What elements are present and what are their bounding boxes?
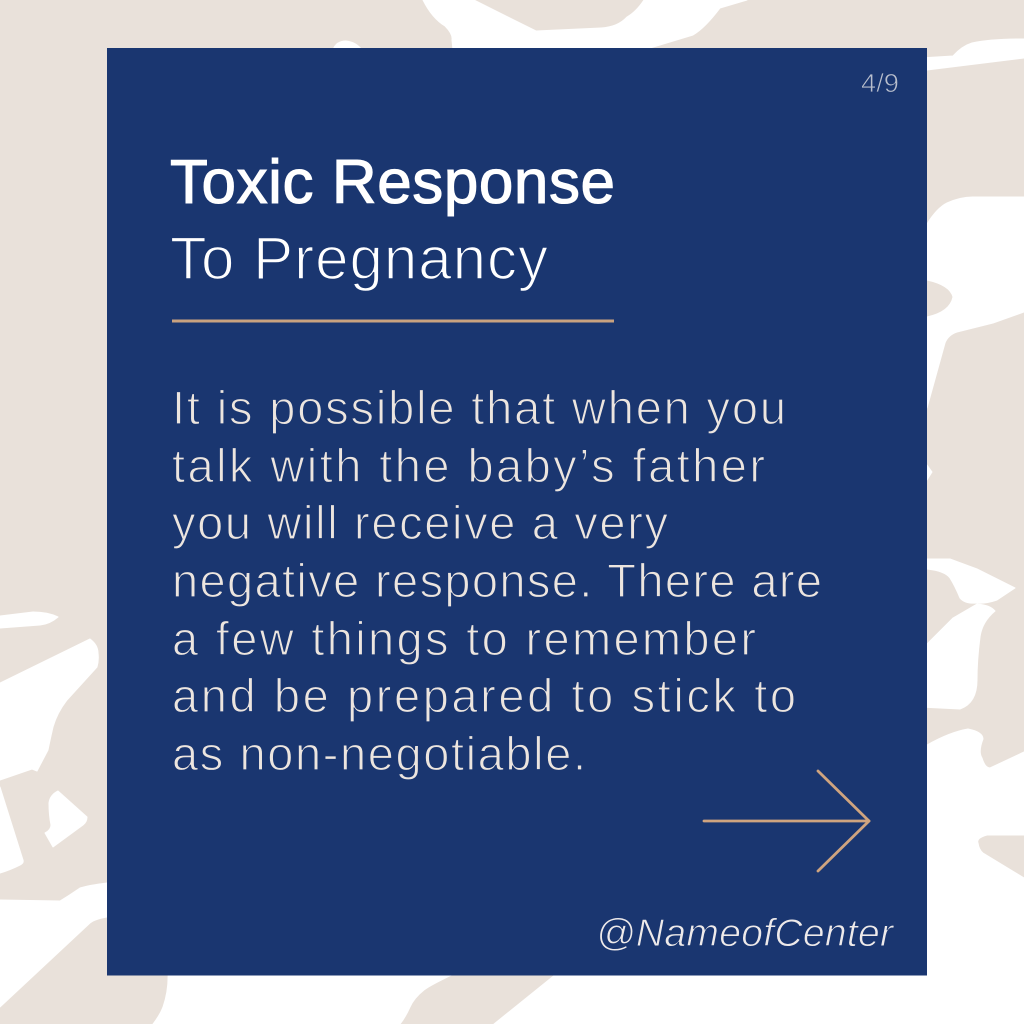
body text: you will receive a very [172, 496, 668, 549]
title underline [172, 320, 614, 322]
body text [172, 381, 822, 780]
arrow [704, 771, 869, 871]
title: bold line: Toxic Response [170, 148, 615, 217]
body text: as non-negotiable. [172, 727, 586, 780]
handle: @NameofCenter [596, 912, 895, 955]
body text: talk with the baby’s father [172, 439, 765, 492]
body text: a few things to remember [172, 612, 756, 665]
panel: navy card [107, 48, 927, 976]
body text: negative response. There are [172, 554, 822, 607]
body text: It is possible that when you [172, 381, 786, 434]
page number: 4/9 [861, 68, 899, 98]
title: light line: To Pregnancy [170, 225, 548, 292]
body text: and be prepared to stick to [172, 669, 796, 722]
